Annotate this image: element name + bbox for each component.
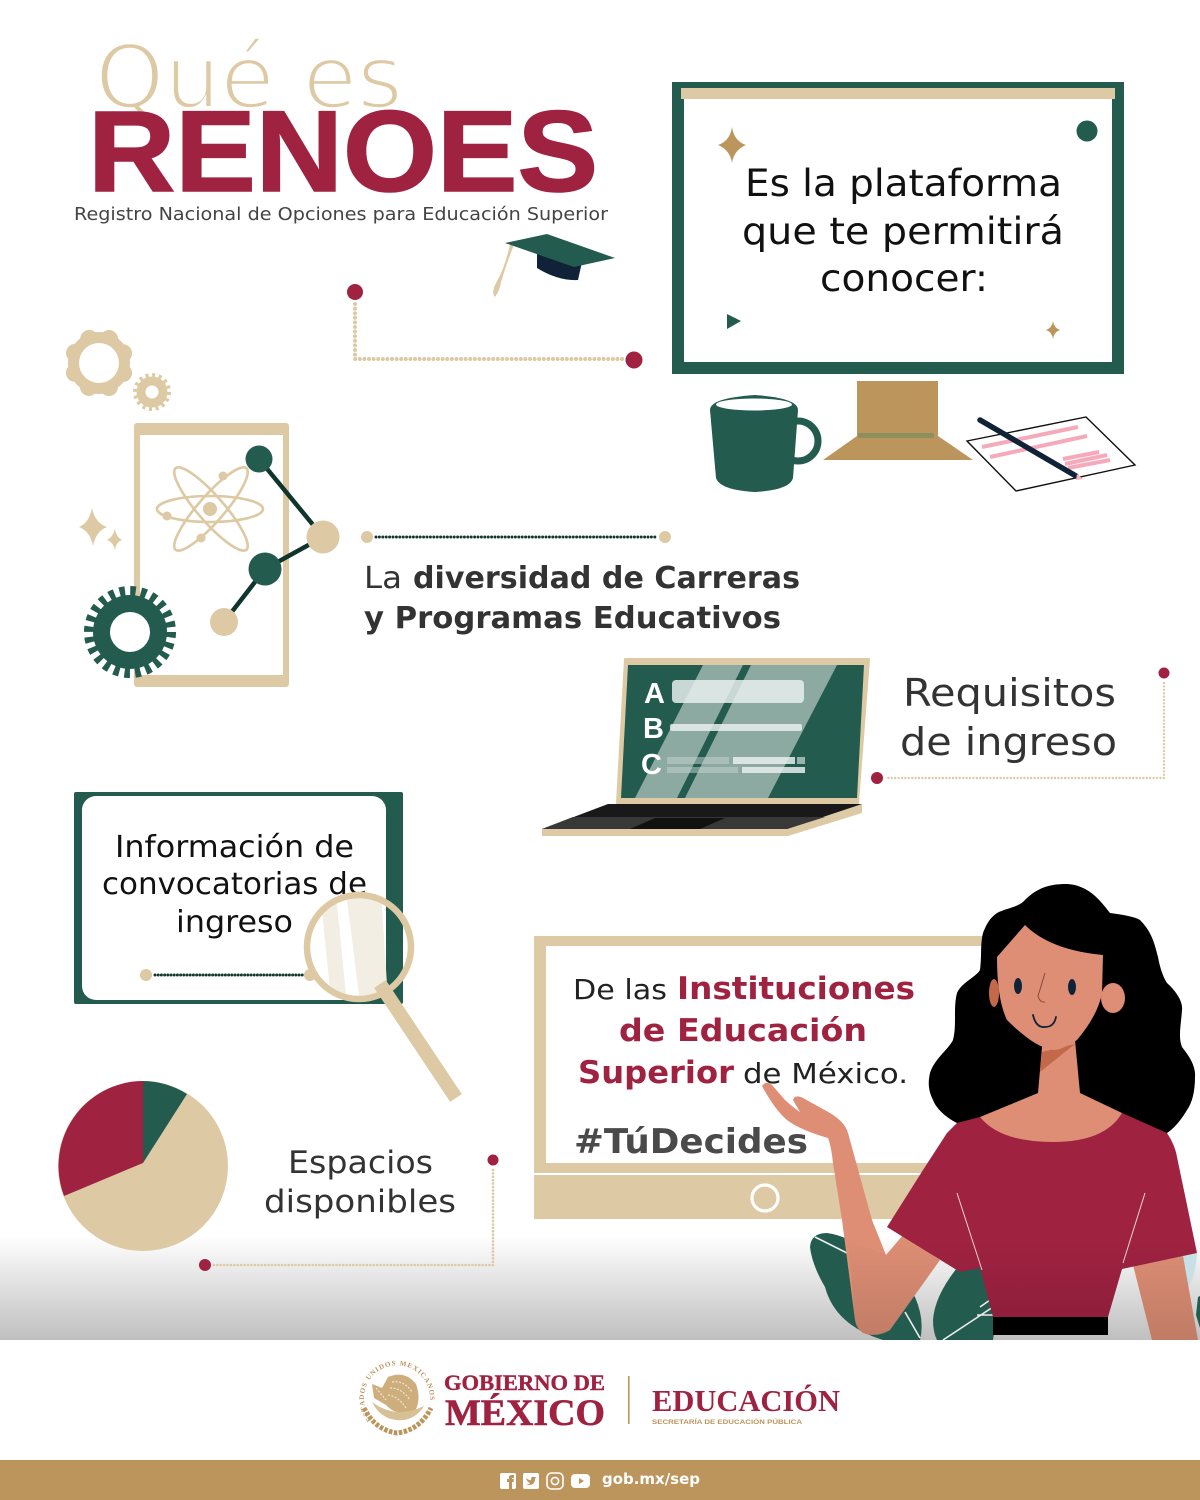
- icon: laptop: [542, 659, 869, 836]
- logo: national seal: ESTADOS UNIDOS MEXICANOS: [359, 1360, 435, 1422]
- footer bar: [0, 1460, 1200, 1500]
- bottom shade: [0, 1235, 1200, 1340]
- illustration: woman: [762, 884, 1198, 1340]
- connector: title to monitor: [347, 284, 642, 368]
- connector: careers: [361, 531, 671, 543]
- icon: instagram: [547, 1473, 563, 1489]
- icon: facebook: [500, 1473, 516, 1489]
- text: diversity of careers: [364, 561, 800, 636]
- letters A B C: [641, 678, 665, 781]
- answer bars: [667, 680, 805, 773]
- shirt seams: [957, 1193, 1145, 1270]
- icon: play triangle: [727, 314, 741, 329]
- text: institutions: De las: [573, 973, 667, 1006]
- text: available places: [264, 1145, 456, 1220]
- panel: phone frame: [134, 423, 289, 687]
- neck and chest: [980, 1040, 1122, 1150]
- letters A B C: B: [643, 713, 664, 745]
- chart: pie: [58, 1081, 228, 1251]
- face: [997, 925, 1103, 1050]
- hashtag: #TúDecides: [574, 1122, 808, 1162]
- figure shade: [848, 1232, 1198, 1340]
- card text: ingreso: [176, 905, 293, 940]
- icon: twitter: [523, 1473, 539, 1489]
- hair: [929, 884, 1195, 1133]
- subtitle: Registro Nacional de Opciones para Educación Superior: [74, 204, 609, 225]
- text: institutions: Instituciones: [677, 971, 915, 1007]
- icon: gold sparkle: [718, 127, 746, 163]
- icon: mug: [710, 395, 818, 492]
- connector: requirements: [871, 668, 1170, 784]
- letters A B C: A: [644, 678, 665, 710]
- text: diversity of careers: y Programas Educativos: [364, 601, 781, 636]
- monitor text: conocer:: [820, 257, 988, 300]
- monitor text: Es la plataforma: [745, 162, 1062, 205]
- keyboard: [542, 804, 862, 836]
- monitor stand: [823, 381, 973, 460]
- card text: [102, 830, 367, 940]
- neck shadow: [1040, 1044, 1075, 1072]
- icon: paper and pen: [967, 417, 1135, 491]
- panel: monitor: [672, 82, 1124, 374]
- icon: green dot: [1076, 120, 1098, 142]
- logo: Gobierno de México: GOBIERNO DE: [444, 1370, 605, 1395]
- footer white area: [0, 1340, 1200, 1460]
- logo: Educación: SECRETARÍA DE EDUCACIÓN PÚBLICA: [652, 1417, 802, 1426]
- text: institutions: [573, 971, 915, 1162]
- connector: places: [199, 1154, 498, 1271]
- panel: convocatorias card: [74, 792, 403, 1004]
- text: institutions: de México.: [743, 1057, 908, 1090]
- left ear: [989, 979, 999, 1007]
- text: diversity of careers: La: [364, 561, 402, 596]
- belt: [993, 1317, 1108, 1335]
- card text: convocatorias de: [102, 867, 367, 902]
- logo: Gobierno de México: [444, 1370, 605, 1434]
- wreath: [364, 1408, 431, 1433]
- title: [74, 26, 609, 225]
- eagle: [372, 1375, 419, 1414]
- text: diversity of careers: diversidad de Carreras: [413, 561, 800, 596]
- text: available places: Espacios: [288, 1145, 433, 1181]
- logo: Educación: EDUCACIÓN: [652, 1383, 840, 1418]
- card text: Información de: [115, 830, 354, 865]
- text: entry requirements: Requisitos: [903, 671, 1116, 715]
- panel: presentation board: [534, 936, 996, 1219]
- text: available places: disponibles: [264, 1184, 456, 1220]
- shirt: [887, 1113, 1197, 1317]
- icon: plant leaves: [810, 1233, 1200, 1340]
- chart: network nodes: [210, 446, 340, 636]
- icon: youtube: [571, 1474, 590, 1488]
- eyes: [1014, 978, 1076, 995]
- heading: RENOES: RENOES: [88, 88, 598, 216]
- icon: tan gears: [58, 322, 169, 409]
- text: institutions: de Educación: [619, 1013, 867, 1049]
- monitor text: [742, 162, 1064, 300]
- nose: [1038, 973, 1045, 1002]
- icon: small sparkle: [1046, 321, 1060, 339]
- icon: magnifying glass: [300, 890, 456, 1098]
- monitor text: que te permitirá: [742, 210, 1064, 253]
- smile: [1033, 1015, 1056, 1027]
- icon: atom: [157, 460, 263, 558]
- text: entry requirements: de ingreso: [900, 720, 1117, 764]
- heading: Qué es: Qué es: [95, 26, 403, 129]
- icon: graduation cap: [493, 234, 615, 297]
- right ear: [1101, 983, 1125, 1013]
- letters A B C: C: [641, 749, 662, 781]
- icon: green gear: [89, 591, 171, 673]
- logo divider: [628, 1376, 630, 1424]
- footer url: gob.mx/sep: [602, 1470, 700, 1488]
- screen reflections: [635, 665, 837, 798]
- logo: Gobierno de México: MÉXICO: [445, 1392, 605, 1434]
- right arm: [1133, 1256, 1198, 1340]
- text: entry requirements: [900, 671, 1117, 764]
- left arm and hand: [762, 1083, 940, 1335]
- icon: tan sparkles: [79, 508, 122, 550]
- card connector: [155, 974, 303, 976]
- text: institutions: Superior: [578, 1055, 735, 1091]
